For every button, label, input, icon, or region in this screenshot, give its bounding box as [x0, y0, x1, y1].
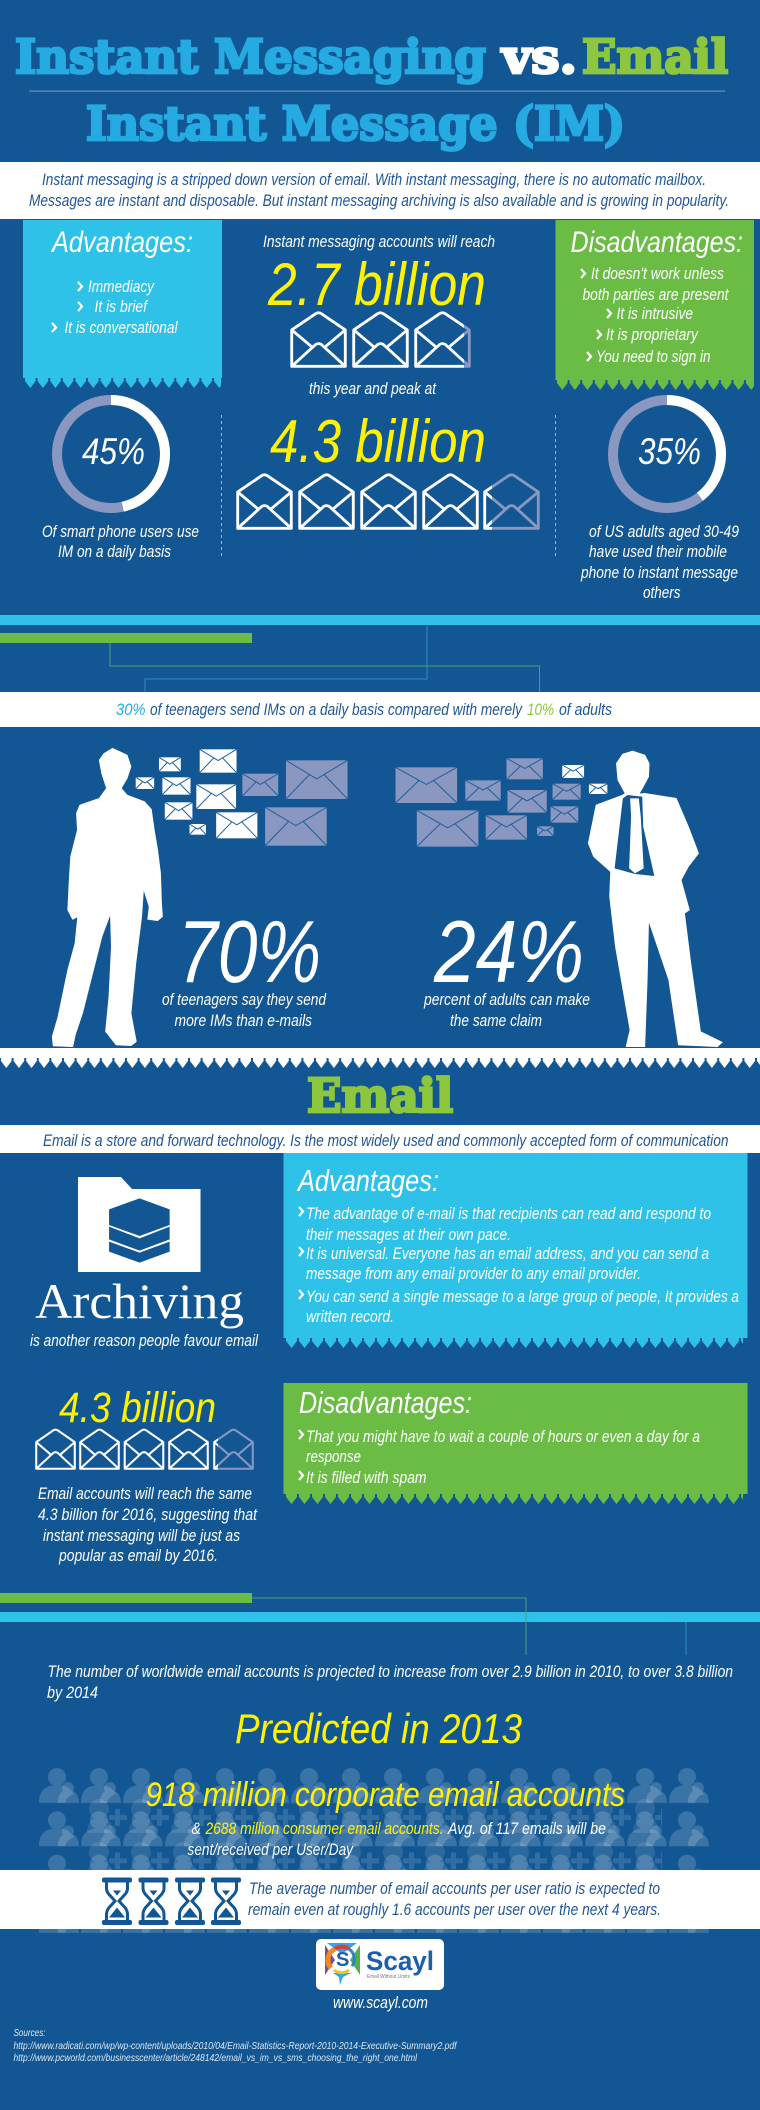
- stat: 70% of teenagers: [162, 902, 327, 1030]
- panel: email disadvantages: It is filled with spam: [306, 1469, 426, 1487]
- panel: email disadvantages: Disadvantages:: [299, 1385, 472, 1420]
- figure: adult silhouette: [588, 751, 722, 1047]
- panel: email advantages: message from any email provider to any email provider.: [306, 1265, 641, 1283]
- chart: 35% donut: others: [643, 584, 680, 602]
- logo: Scayl: [316, 1939, 444, 1990]
- title: [15, 30, 728, 85]
- band: 30% vs 10%: 10%: [527, 701, 554, 719]
- stat: 918 million: sent/received per User/Day: [188, 1841, 354, 1859]
- band: accounts per user: The average number of email accounts per user ratio is expected to: [249, 1880, 660, 1898]
- stat: 918 million: &: [192, 1820, 201, 1838]
- panel: email disadvantages: response: [306, 1448, 361, 1466]
- stat: 918 million: [146, 1776, 625, 1859]
- text: worldwide accounts: by 2014: [47, 1684, 98, 1702]
- divider bars upper: [0, 615, 760, 692]
- text: sources: http://www.radicati.com/wp/wp-content/uploads/2010/04/Email-Statistics-Report-2010-2014-Executive-Summary2.pdf: [14, 2040, 457, 2052]
- text: email accounts: 4.3 billion for 2016, suggesting that: [38, 1506, 258, 1524]
- panel: IM disadvantages: both parties are present: [582, 286, 730, 304]
- figure: teenager silhouette: [52, 748, 162, 1047]
- scalloped white divider: [0, 1048, 760, 1068]
- text: sources: [14, 2027, 457, 2064]
- panel: email advantages: written record.: [306, 1308, 394, 1326]
- panel: email advantages: their messages at their own pace.: [306, 1226, 511, 1244]
- stat: 918 million: 918 million corporate email accounts: [146, 1776, 625, 1814]
- chart: 35% donut: 35%: [638, 431, 701, 472]
- chart: 45% donut: 45%: [82, 431, 145, 472]
- panel: email disadvantages: [284, 1383, 748, 1504]
- stat: 918 million: 2688 million consumer email accounts.: [205, 1820, 444, 1838]
- dashed dividers: [222, 415, 556, 558]
- panel: IM disadvantages: [556, 220, 754, 390]
- panel: IM advantages: Advantages:: [50, 226, 193, 259]
- stat: 24% of adults: percent of adults can make: [423, 991, 590, 1009]
- panel: IM advantages: It is conversational: [64, 319, 179, 337]
- stat: 70% of teenagers: 70%: [178, 902, 321, 1001]
- panel: IM disadvantages: You need to sign in: [596, 348, 710, 366]
- heading: Email: Email: [307, 1069, 453, 1124]
- stat: 918 million: Avg. of 117 emails will be: [447, 1820, 606, 1838]
- icons: adult messages: [396, 758, 607, 847]
- stat: 70% of teenagers: of teenagers say they send: [162, 991, 327, 1009]
- chart: 35% donut: have used their mobile: [589, 543, 727, 561]
- stat: accounts will reach 2.7 billion: Instant messaging accounts will reach: [263, 233, 495, 251]
- chart: 35% donut: [580, 400, 739, 602]
- stat: peak at 4.3 billion: this year and peak at: [309, 380, 437, 398]
- panel: email advantages: [284, 1153, 748, 1348]
- stat: accounts will reach 2.7 billion: 2.7 billion: [267, 251, 486, 318]
- text: sources: Sources:: [14, 2027, 46, 2039]
- icon: envelopes row email: [36, 1430, 253, 1469]
- panel: IM disadvantages: It is intrusive: [616, 305, 693, 323]
- stat: 70% of teenagers: more IMs than e-mails: [174, 1012, 312, 1030]
- intro band: [0, 162, 760, 219]
- chart: 45% donut: IM on a daily basis: [58, 543, 171, 561]
- panel: IM advantages: [23, 220, 222, 388]
- band: 30% vs 10%: of teenagers send IMs on a daily basis compared with merely: [150, 701, 523, 719]
- icon: hourglasses: [102, 1878, 241, 1925]
- band: accounts per user: [0, 1870, 760, 1929]
- panel: IM advantages: Immediacy: [88, 278, 155, 296]
- crowd pattern: [39, 1768, 711, 1934]
- divider bars lower: [0, 1593, 760, 1655]
- icon: envelopes row 4.3: [238, 475, 538, 528]
- stat: peak at 4.3 billion: 4.3 billion: [270, 408, 486, 475]
- logo: Scayl: Email Without Limits: [367, 1974, 410, 1980]
- panel: email advantages: Advantages:: [296, 1163, 439, 1198]
- text: Archiving: [30, 1273, 259, 1350]
- text: email accounts: Email accounts will reach the same: [38, 1485, 252, 1503]
- band: 30% vs 10%: [0, 692, 760, 727]
- icon: archive folder: [78, 1177, 200, 1272]
- band: 30% vs 10%: of adults: [559, 701, 612, 719]
- title: Email: [582, 30, 728, 85]
- stat: email 4.3 billion: 4.3 billion: [59, 1384, 216, 1432]
- text: website: www.scayl.com: [333, 1994, 428, 2012]
- panel: IM advantages: It is brief: [94, 298, 149, 316]
- logo: Scayl: S: [336, 1949, 349, 1971]
- band: email definition: [0, 1125, 760, 1153]
- stat: 24% of adults: the same claim: [450, 1012, 542, 1030]
- title: Instant Messaging: [15, 30, 486, 85]
- text: Archiving: is another reason people favour email: [30, 1332, 259, 1350]
- heading: Instant Message (IM): Instant Message (IM): [86, 97, 625, 152]
- text: Archiving: Archiving: [35, 1273, 244, 1329]
- title: vs.: [501, 30, 577, 85]
- chart: 45% donut: [42, 400, 199, 561]
- logo: Scayl: Scayl: [366, 1946, 434, 1976]
- chart: 45% donut: Of smart phone users use: [42, 523, 199, 541]
- panel: IM disadvantages: It is proprietary: [606, 326, 699, 344]
- heading: Predicted in 2013: Predicted in 2013: [235, 1705, 522, 1752]
- text: sources: http://www.pcworld.com/businesscenter/article/248142/email_vs_im_vs_sms_choosing_the_right_one.html: [14, 2052, 418, 2064]
- stat: 24% of adults: 24%: [433, 902, 584, 1001]
- panel: IM disadvantages: It doesn't work unless: [591, 265, 724, 283]
- text: email accounts: instant messaging will be just as: [43, 1527, 240, 1545]
- band: accounts per user: remain even at roughly 1.6 accounts per user over the next 4 years.: [248, 1901, 661, 1919]
- stat: 24% of adults: [423, 902, 590, 1030]
- text: worldwide accounts: [47, 1663, 733, 1702]
- text: email accounts: popular as email by 2016.: [58, 1547, 218, 1565]
- icon: envelopes row 2.7: [292, 313, 469, 366]
- text: email accounts: [38, 1485, 258, 1565]
- icons: teenager messages: [136, 749, 348, 846]
- band: 30% vs 10%: 30%: [116, 701, 146, 719]
- stat: peak at 4.3 billion: [270, 380, 486, 475]
